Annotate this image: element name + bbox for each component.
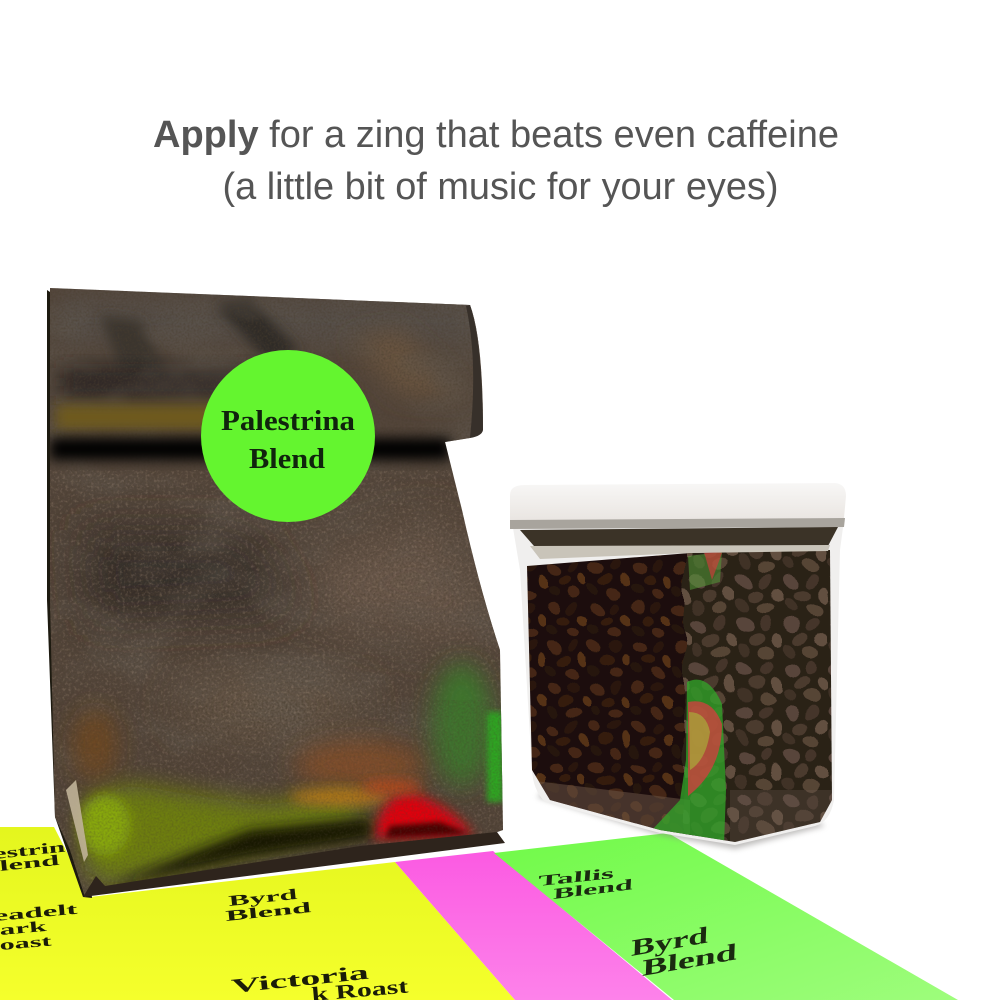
- green sheet label text: Byrd: Byrd: [631, 922, 709, 962]
- bag orange arc: [290, 789, 390, 805]
- bag front: [40, 280, 510, 910]
- bag orange glow: [295, 741, 425, 789]
- jar beans: [527, 550, 832, 842]
- jar neck highlight: [530, 545, 830, 559]
- jar lid: [510, 483, 846, 521]
- bag base: [83, 832, 505, 897]
- yellow sheet label text: Blend: Blend: [225, 900, 313, 925]
- title: Apply for a zing that beats even caffeine: [153, 113, 839, 155]
- yellow sheet label text: Byrd: Byrd: [228, 887, 299, 910]
- green sheet label text: Blend: Blend: [642, 939, 737, 982]
- green and red reflection in jar: [652, 545, 726, 845]
- coffee bag: [40, 280, 510, 910]
- bag roll dark band: [60, 368, 250, 396]
- bag fold shadow: [50, 438, 450, 460]
- jar rim: [510, 518, 845, 529]
- bag final grain: [76, 700, 503, 884]
- bag paper grain: [50, 288, 503, 832]
- coffee jar: [510, 483, 849, 860]
- green sheet label text: Blend: Blend: [553, 877, 634, 903]
- jar body: [512, 520, 844, 845]
- bag red glow: [372, 793, 474, 838]
- bag crease highlight: [306, 525, 494, 642]
- sticker text: Blend: Blend: [249, 443, 325, 475]
- sticker: [201, 350, 375, 522]
- green sheet label text: Tallis: Tallis: [538, 866, 615, 890]
- bag foil corner: [66, 780, 88, 862]
- green label sheet: [494, 833, 958, 1000]
- bag dark lower shadow: [110, 818, 372, 886]
- bag olive fold glow: [56, 405, 221, 429]
- bag cloud mottling: [50, 306, 502, 783]
- bag mid highlight: [180, 680, 360, 730]
- subtitle: (a little bit of music for your eyes): [222, 165, 778, 207]
- bag side gusset: [47, 290, 92, 898]
- pink label sheet: [395, 851, 672, 1000]
- sticker text: Palestrina: Palestrina: [221, 405, 356, 437]
- bag olive glow: [85, 785, 370, 885]
- bag paper specks: [40, 470, 510, 910]
- bag roll wrinkles: [215, 300, 300, 365]
- bag gusset green edge: [56, 600, 75, 795]
- bag roll shading: [55, 296, 485, 346]
- jar shadow: [537, 790, 825, 849]
- yellow sheet label text: Victoria: Victoria: [230, 962, 370, 998]
- bag green glow: [432, 663, 492, 787]
- bag roll edge: [466, 305, 483, 438]
- jar seal band: [520, 527, 838, 546]
- yellow label sheet: [0, 827, 515, 1000]
